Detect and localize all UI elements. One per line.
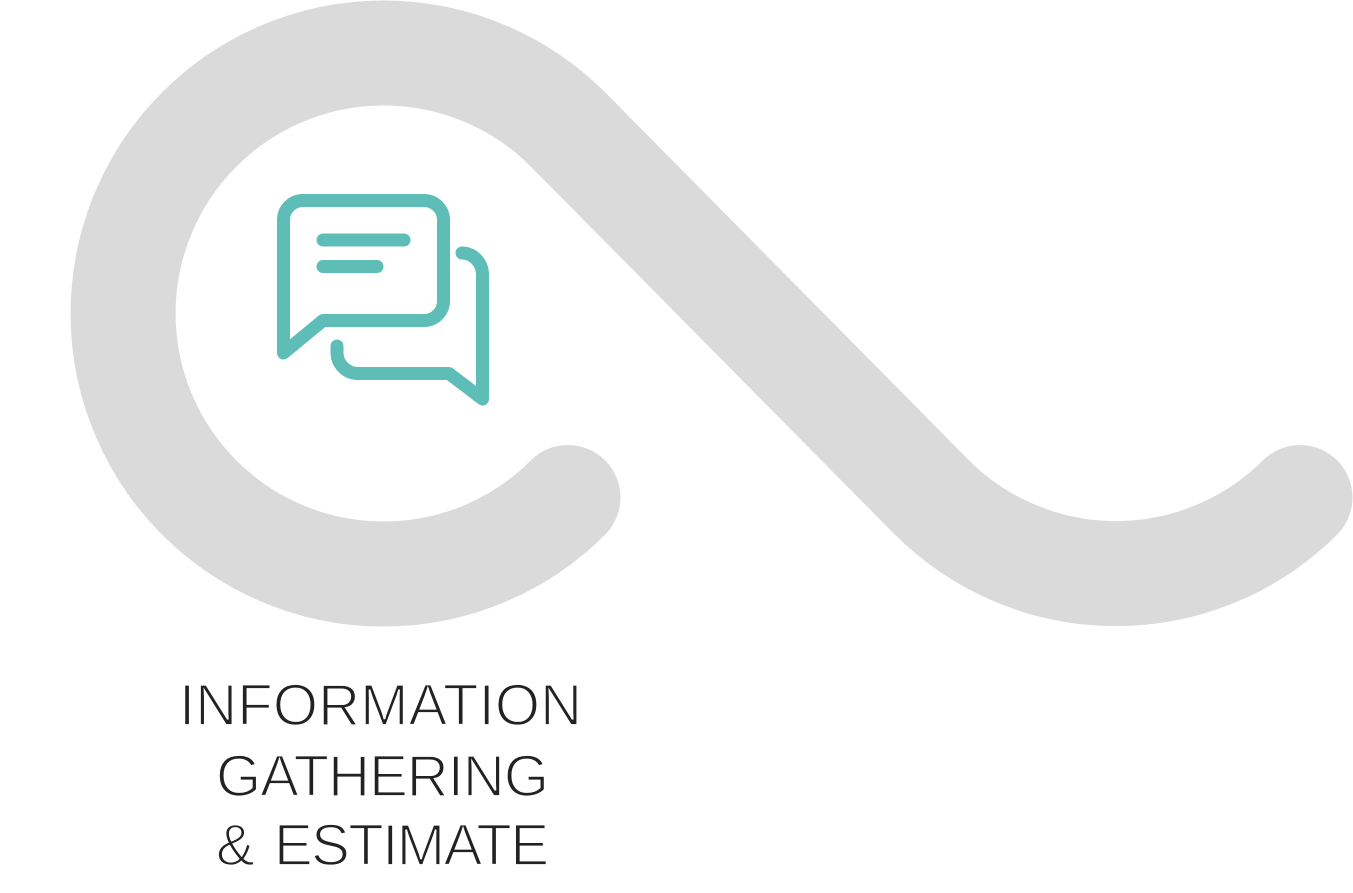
main speech bubble bbox=[284, 200, 444, 353]
title: information gathering and estimate: GATHERING bbox=[216, 744, 549, 809]
title: information gathering and estimate: ESTIMATE bbox=[274, 813, 549, 878]
title: information gathering and estimate: INFORMATION bbox=[179, 673, 582, 738]
title: information gathering and estimate bbox=[179, 673, 582, 878]
title: information gathering and estimate: & bbox=[216, 813, 255, 878]
icon: chat speech bubbles bbox=[284, 200, 482, 399]
message lines bbox=[323, 240, 404, 266]
secondary speech bubble bbox=[337, 253, 482, 399]
grey looping ribbon path bbox=[123, 53, 1300, 574]
